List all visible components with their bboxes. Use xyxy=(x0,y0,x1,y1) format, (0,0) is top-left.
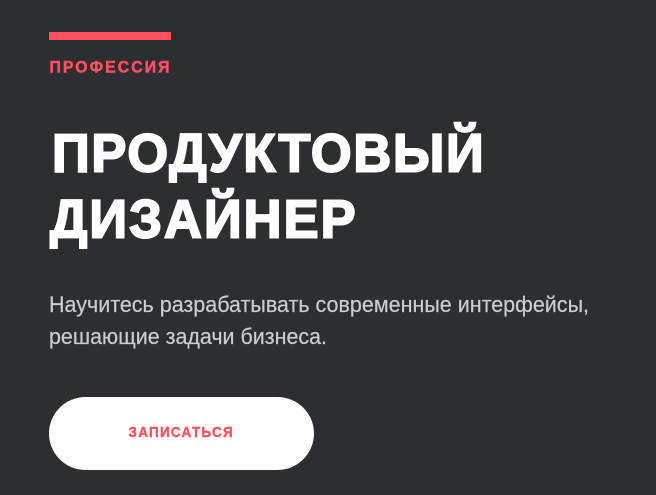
description: решающие задачи бизнеса. xyxy=(49,324,327,349)
description: Научитесь разрабатывать современные интерфейсы, xyxy=(49,292,589,317)
category label: ПРОФЕССИЯ xyxy=(50,58,169,77)
signup button xyxy=(49,397,314,470)
title xyxy=(50,122,484,250)
title: ПРОДУКТОВЫЙ xyxy=(52,122,484,184)
title: ДИЗАЙНЕР xyxy=(50,188,356,250)
accent bar xyxy=(49,32,171,40)
description xyxy=(49,292,589,349)
signup button: ЗАПИСАТЬСЯ xyxy=(128,424,233,440)
